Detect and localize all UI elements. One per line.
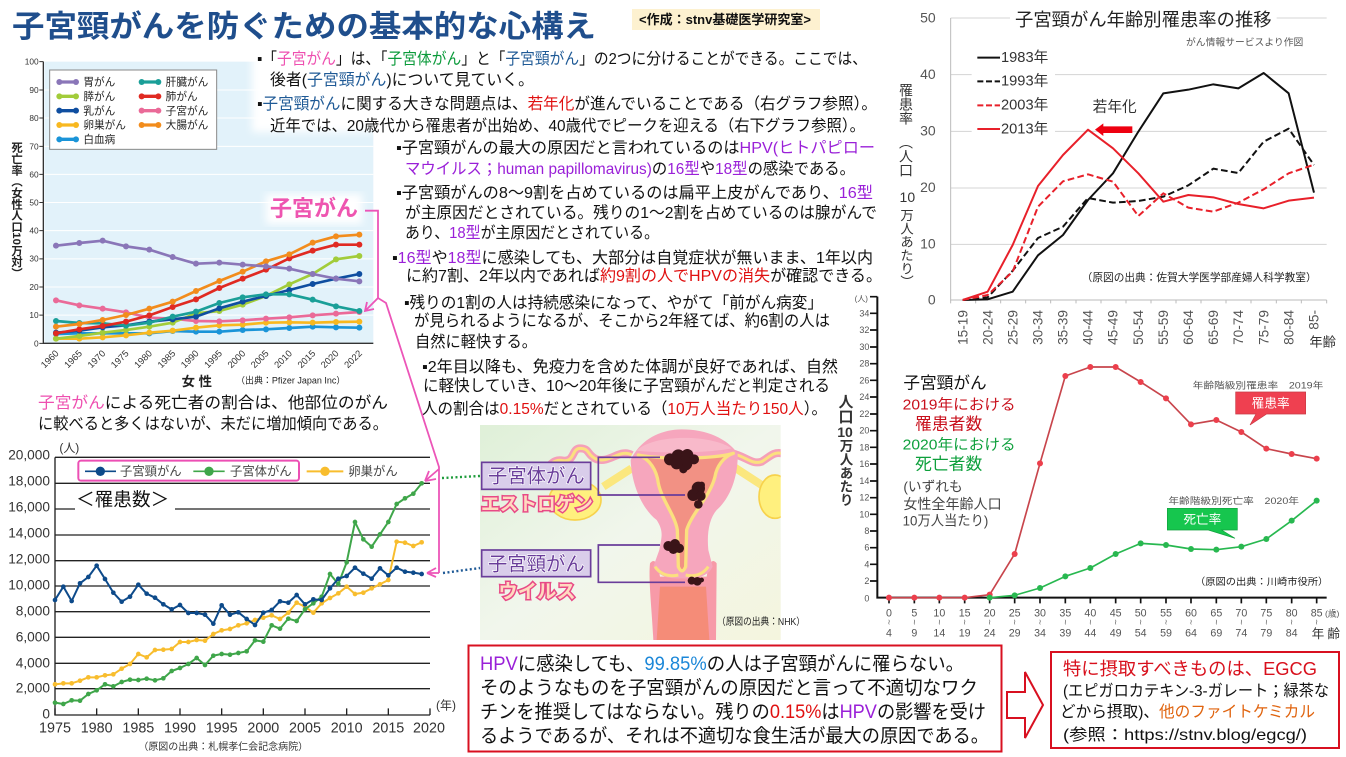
conclusion box: HPV: そのようなものを子宮頸がんの原因だと言って不適切なワク xyxy=(480,677,978,699)
y axis title: per 100k: 人口 xyxy=(836,394,854,424)
text block: HPV as main cause xyxy=(396,139,877,242)
x axis age labels: ≀ xyxy=(1139,617,1142,626)
source note: （原図の出典：佐賀大学医学部産婦人科学教室） xyxy=(1082,271,1317,284)
y axis title: 10 xyxy=(900,189,915,205)
x axis age labels: 35 xyxy=(1059,607,1071,619)
x axis age labels: 19 xyxy=(959,627,971,639)
chart: incidence count by year: 8,000 xyxy=(16,603,50,618)
chart description: 子宮頸がん xyxy=(903,373,987,392)
chart: age-specific incidence and death rate: 8 xyxy=(864,526,869,536)
y axis title: （人口 xyxy=(898,135,914,177)
x axis age labels: 70 xyxy=(1235,607,1247,619)
text block: HPV as main cause: ▪子宮頸がんの8～9割を占めているのは扁平上皮がんであり、 16型 xyxy=(396,184,873,202)
chart: cancer mortality by site xyxy=(10,57,373,389)
x axis age labels: 60 xyxy=(1185,607,1197,619)
chart: incidence count by year: 0 xyxy=(42,707,50,722)
chart: incidence count by year: (人) xyxy=(59,441,79,455)
chart: incidence count by year: 6,000 xyxy=(16,629,50,644)
x axis age labels: 35-39 xyxy=(1056,310,1071,345)
chart: cancer mortality by site: 1960 xyxy=(39,348,61,370)
callout: death rate: 死亡率 xyxy=(1183,513,1221,527)
text block: classification and young-age trend: 後者(子宮頸がん)について見ていく。 xyxy=(270,71,534,89)
chart: cancer mortality by site: 1985 xyxy=(156,348,177,370)
chart description: (いずれも xyxy=(903,479,963,495)
label: cervical cancer: ウイルス xyxy=(498,581,576,603)
x axis age labels: 75-79 xyxy=(1256,310,1271,345)
y axis title: 万人あたり） xyxy=(898,208,913,288)
legend: cancer sites: 卵巣がん xyxy=(83,119,126,132)
x axis age labels: ≀ xyxy=(1265,617,1268,626)
x axis age labels: 49 xyxy=(1110,627,1122,639)
chart: incidence count by year: 10,000 xyxy=(8,577,50,592)
x axis age labels: 84 xyxy=(1286,627,1298,639)
source note: NHK: （原図の出典：NHK） xyxy=(717,615,805,628)
chart: incidence count by year: 20,000 xyxy=(8,447,50,462)
x axis age labels: ≀ xyxy=(1064,617,1067,626)
connector: dotted link to cervical cancer xyxy=(443,568,480,573)
chart: age-specific incidence and death rate: 22 xyxy=(859,409,869,419)
x axis age labels: ≀ xyxy=(1039,617,1041,626)
chart: incidence count by year: 1985 xyxy=(122,721,154,737)
chart: incidence by age trend: 20 xyxy=(920,179,936,195)
arrow: younger onset: 若年化 xyxy=(1093,98,1137,115)
x axis age labels: 55-59 xyxy=(1156,310,1171,345)
chart: age-specific incidence and death rate: (人) xyxy=(855,294,868,303)
y axis title xyxy=(898,83,915,288)
legend: cancer sites: 子宮がん xyxy=(166,104,209,117)
text block: uterine cancer death share: 子宮がんによる死亡者の割合は、他部位のがん xyxy=(38,394,388,412)
y axis title: per 100k: 10 xyxy=(837,424,853,440)
chart: age-specific incidence and death rate: 16 xyxy=(859,459,869,469)
chart: age-specific incidence and death rate: 24 xyxy=(859,392,869,402)
x axis age labels: 5 xyxy=(911,607,917,619)
chart description: 2019年における xyxy=(903,396,1016,413)
label: incidence: ＜罹患数＞ xyxy=(76,489,169,510)
callout: death rate: 年齢階級別死亡率 2020年 xyxy=(1168,495,1299,506)
x axis age labels: ≀ xyxy=(938,617,941,626)
text block: natural clearance: 自然に軽快する。 xyxy=(415,333,537,351)
callout: death rate xyxy=(1167,495,1299,538)
callout: incidence rate: 年齢階級別罹患率 2019年 xyxy=(1193,379,1323,390)
text block: HPV as main cause: が主原因だとされている。残りの1～2割を占めているのは腺がんで xyxy=(405,204,877,222)
x axis age labels: 50-54 xyxy=(1131,310,1146,345)
x axis units xyxy=(1312,607,1340,641)
chart: incidence count by year: 16,000 xyxy=(8,499,50,514)
chart: age-specific incidence and death rate: 14 xyxy=(859,476,869,486)
text block: uterine cancer death share: に較べると多くはないが、未だに増加傾向である。 xyxy=(38,415,388,433)
x axis age labels: 75 xyxy=(1260,607,1272,619)
source note: （出典：Pfizer Japan Inc） xyxy=(236,374,345,385)
connector: uterine cancer callout: 子宮がん xyxy=(270,196,358,221)
x axis age labels: 54 xyxy=(1135,627,1147,639)
x axis age labels: ≀ xyxy=(963,617,966,626)
chart: cancer mortality by site: 1975 xyxy=(109,348,131,370)
chart: incidence count by year: 2010 xyxy=(331,721,363,737)
connector: dotted link to uterine body cancer xyxy=(442,476,480,478)
chart: incidence by age trend xyxy=(898,7,1336,350)
x axis age labels: 65 xyxy=(1210,607,1222,619)
legend: years: 1993年 xyxy=(1001,73,1048,90)
chart: age-specific incidence and death rate: 12 xyxy=(859,493,869,503)
chart: cancer mortality by site: 1980 xyxy=(132,348,154,370)
x axis unit: 年齢 xyxy=(1309,335,1336,350)
x axis age labels: 34 xyxy=(1034,627,1046,639)
bracket lines xyxy=(598,457,685,582)
legend: years: 2013年 xyxy=(1001,120,1048,137)
chart: cancer mortality by site: 80 xyxy=(29,113,39,123)
legend: cancer sites: 乳がん xyxy=(83,104,116,117)
arrow: to recommendation xyxy=(1007,672,1043,738)
text block: natural clearance: が見られるようになるが、そこから2年経てば、約6割の人は xyxy=(414,312,830,330)
x axis age labels: 79 xyxy=(1260,627,1272,639)
x axis age labels: ≀ xyxy=(1190,617,1192,626)
legend: cancer sites: 肺がん xyxy=(166,90,198,103)
chart: age-specific incidence and death rate: 2 xyxy=(864,576,869,586)
chart: incidence count by year: 2015 xyxy=(372,721,404,737)
chart: incidence count by year: 1990 xyxy=(164,721,196,737)
callout: incidence rate xyxy=(1193,379,1323,425)
x axis age labels: ≀ xyxy=(1114,617,1117,626)
legend: years xyxy=(977,49,1048,137)
chart: incidence count by year xyxy=(8,441,456,753)
chart: cancer mortality by site: 1965 xyxy=(62,348,84,370)
label: cervical cancer: 子宮頸がん xyxy=(488,553,585,575)
ovaries and tubes xyxy=(549,448,791,520)
title: 子宮頸がんを防ぐための基本的な心構え xyxy=(12,9,596,44)
text block: HPV as main cause: マウイルス；human papillomavirus)の16型や18型の感染である。 xyxy=(405,160,855,178)
chart: incidence by age trend: 50 xyxy=(920,9,936,25)
x axis age labels: 50 xyxy=(1135,607,1147,619)
chart: incidence by age trend: 40 xyxy=(920,66,936,82)
chart title: 子宮頸がん年齢別罹患率の推移 xyxy=(1015,9,1272,30)
text block: HPV as main cause: ▪子宮頸がんの最大の原因だと言われているのはHPV(ヒトパピロー xyxy=(396,139,875,157)
x axis age labels: ≀ xyxy=(988,617,991,626)
chart: incidence count by year: 2000 xyxy=(247,721,279,737)
x axis age labels xyxy=(886,607,1323,639)
x axis age labels: 65-69 xyxy=(1206,310,1221,345)
x axis age labels: ≀ xyxy=(1089,617,1092,626)
recommendation box: (エピガロカテキン-3-ガレート；緑茶な xyxy=(1063,682,1329,700)
chart: cancer mortality by site: 1995 xyxy=(202,348,224,370)
chart description: 女性全年齢人口 xyxy=(903,496,1002,512)
text block: classification and young-age trend: ▪子宮頸がんに関する大きな問題点は、若年化が進んでいることである（右グラフ参照）。 xyxy=(257,95,877,113)
x axis age labels: 9 xyxy=(911,627,917,639)
chart description xyxy=(903,373,1016,529)
conclusion box: HPV xyxy=(468,646,1002,752)
text block: uterine cancer death share xyxy=(38,394,388,433)
chart: cancer mortality by site: 70 xyxy=(29,141,39,151)
label: uterine body cancer: エストロゲン xyxy=(481,494,593,515)
x axis title: 女 性 xyxy=(182,373,212,389)
x axis age labels: ≀ xyxy=(1215,617,1218,626)
chart description: 2020年における xyxy=(903,436,1016,453)
label: uterine body cancer: 子宮体がん xyxy=(488,466,585,488)
conclusion box: HPV: HPVに感染しても、99.85%の人は子宮頸がんに罹らない。 xyxy=(480,653,964,675)
x axis age labels: ≀ xyxy=(1240,617,1243,626)
x axis age labels: 39 xyxy=(1059,627,1071,639)
chart: cancer mortality by site: 2005 xyxy=(249,348,271,370)
x axis age labels: 24 xyxy=(984,627,996,639)
legend: uterine / ovarian series: 子宮体がん xyxy=(230,464,292,479)
x axis age labels: 40-44 xyxy=(1081,310,1096,345)
x axis age labels: 55 xyxy=(1160,607,1172,619)
legend: cancer sites xyxy=(50,70,217,149)
text block: natural clearance: に約7割、2年以内であれば約9割の人でHPVの消失が確認できる。 xyxy=(406,267,882,285)
text block: natural clearance: 人の割合は0.15%だとされている（10万人当たり150人）。 xyxy=(422,400,827,418)
text block: natural clearance: ▪2年目以降も、免疫力を含めた体調が良好であれば、自然 xyxy=(422,358,838,376)
x axis age labels: 85- xyxy=(1307,310,1322,330)
tumors xyxy=(663,449,706,586)
x axis age labels: ≀ xyxy=(1290,617,1293,626)
x axis age labels: 69 xyxy=(1210,627,1222,639)
chart: cancer mortality by site: 60 xyxy=(29,169,39,179)
recommendation box: (参照：https://stnv.blog/egcg/) xyxy=(1063,726,1307,744)
x axis units: 年齢 xyxy=(1312,627,1340,641)
chart: cancer mortality by site: 2015 xyxy=(296,348,317,370)
legend: uterine / ovarian series: 卵巣がん xyxy=(348,464,398,479)
chart: cancer mortality by site: 100 xyxy=(25,57,39,67)
x axis age labels: 29 xyxy=(1009,627,1021,639)
text block: natural clearance: ▪16型や18型に感染しても、大部分は自覚症状が無いまま、1年以内 xyxy=(392,249,873,267)
x axis age labels: ≀ xyxy=(888,617,890,626)
x axis age labels: 30 xyxy=(1034,607,1046,619)
chart: age-specific incidence and death rate: 28 xyxy=(859,359,869,369)
x axis age labels: 74 xyxy=(1235,627,1247,639)
x axis age labels: 15 xyxy=(959,607,971,619)
chart: cancer mortality by site: 10 xyxy=(29,310,39,320)
chart: age-specific incidence and death rate: 10 xyxy=(859,509,869,519)
legend: cancer sites: 胃がん xyxy=(83,76,116,89)
chart: cancer mortality by site: 2000 xyxy=(226,348,247,370)
x axis age labels: ≀ xyxy=(1315,617,1318,626)
chart: age-specific incidence and death rate: 18 xyxy=(859,442,869,452)
x axis age labels: 14 xyxy=(933,627,945,639)
chart: age-specific incidence and death rate: 6 xyxy=(864,543,869,553)
text block: natural clearance: ▪残りの1割の人は持続感染になって、やがて「前がん病変」 xyxy=(404,294,823,312)
white backing behind top text xyxy=(252,42,392,132)
chart: age-specific incidence and death rate: 20 xyxy=(859,426,869,436)
legend: cancer sites: 大腸がん xyxy=(166,119,209,132)
chart: cancer mortality by site: 1990 xyxy=(179,348,201,370)
chart: incidence count by year: (年) xyxy=(436,698,456,712)
chart: age-specific incidence and death rate: 26 xyxy=(859,375,869,385)
text block: natural clearance xyxy=(392,249,882,418)
x axis age labels: 80-84 xyxy=(1281,310,1296,345)
author tag xyxy=(632,9,820,30)
recommendation box xyxy=(1051,652,1339,748)
x axis age labels: ≀ xyxy=(1013,617,1016,626)
x axis age labels: 85 xyxy=(1311,607,1323,619)
x axis age labels: ≀ xyxy=(1165,617,1167,626)
chart: age-specific incidence and death rate: 0 xyxy=(864,593,869,603)
legend: cancer sites: 膵がん xyxy=(83,90,116,103)
chart: incidence count by year: 4,000 xyxy=(16,655,50,670)
source note: （原図の出典：川崎市役所） xyxy=(1195,576,1328,588)
data credit: がん情報サービスより作図 xyxy=(1186,37,1303,49)
chart: incidence count by year: 2020 xyxy=(413,721,445,737)
x axis age labels: 25-29 xyxy=(1005,310,1020,345)
chart description: 罹患者数 xyxy=(915,415,983,434)
chart: cancer mortality by site: 20 xyxy=(29,282,39,292)
legend: years: 2003年 xyxy=(1001,97,1048,114)
text block: HPV as main cause: あり、18型が主原因だとされている。 xyxy=(405,224,659,242)
x axis age labels: 45 xyxy=(1110,607,1122,619)
x axis age labels: 44 xyxy=(1084,627,1096,639)
chart: cancer mortality by site: 0 xyxy=(34,338,39,348)
uterine cavity xyxy=(638,453,733,571)
chart: incidence count by year: 18,000 xyxy=(8,473,50,488)
legend: uterine / ovarian series: 子宮頸がん xyxy=(120,464,182,479)
chart: cancer mortality by site: 2020 xyxy=(319,348,341,370)
chart: cancer mortality by site: 2022 xyxy=(342,348,364,370)
chart: age-specific incidence and death rate: 30 xyxy=(859,342,869,352)
x axis age labels: 4 xyxy=(886,627,892,639)
chart: age-specific incidence and death rate: 32 xyxy=(859,325,869,335)
callout: incidence rate: 罹患率 xyxy=(1252,397,1290,411)
author tag: <作成：stnv基礎医学研究室> xyxy=(639,12,811,27)
y axis title: per 100k: 万人あたり xyxy=(838,439,853,507)
y axis title: 罹患率 xyxy=(898,83,914,126)
x axis age labels: 64 xyxy=(1185,627,1197,639)
label: cervical cancer xyxy=(482,550,591,603)
x axis age labels: 20-24 xyxy=(980,310,995,345)
x axis age labels: 25 xyxy=(1009,607,1021,619)
chart: incidence by age trend: 30 xyxy=(920,122,936,138)
recommendation box: 特に摂取すべきものは、EGCG xyxy=(1063,659,1317,679)
x axis age labels: ≀ xyxy=(913,617,916,626)
chart: incidence count by year: 2005 xyxy=(289,721,321,737)
x axis age labels: 60-64 xyxy=(1181,310,1196,345)
chart: age-specific incidence and death rate: 4 xyxy=(864,559,869,569)
chart: cancer mortality by site: 1970 xyxy=(86,348,107,370)
y axis title: 死亡率（女性人口10万対） xyxy=(10,142,23,279)
recommendation box: どから摂取)、他のファイトケミカル xyxy=(1060,703,1315,721)
text block: classification and young-age trend: ▪「子宮がん」は、「子宮体がん」と「子宮頸がん」の2つに分けることができる。ここでは、 xyxy=(257,50,867,68)
chart: incidence count by year: 14,000 xyxy=(8,525,50,540)
x axis age labels: 10 xyxy=(933,607,945,619)
legend: years: 1983年 xyxy=(1001,49,1048,66)
label: uterine body cancer xyxy=(481,462,593,515)
connector: uterine cancer callout xyxy=(266,194,439,577)
x axis age labels: 15-19 xyxy=(955,310,970,345)
conclusion box: HPV: るようであるが、それは不適切な食生活が最大の原因である。 xyxy=(480,725,989,747)
chart description: 死亡者数 xyxy=(915,455,983,474)
chart: cancer mortality by site: 2010 xyxy=(272,348,294,370)
chart: age-specific incidence and death rate xyxy=(855,294,1340,641)
chart: cancer mortality by site: 90 xyxy=(29,85,39,95)
text block: classification and young-age trend: 近年では、20歳代から罹患者が出始め、40歳代でピークを迎える（右下グラフ参照）。 xyxy=(270,117,865,135)
conclusion box: HPV: チンを推奨してはならない。残りの0.15%はHPVの影響を受け xyxy=(480,701,986,723)
chart: incidence count by year: 1995 xyxy=(206,721,238,737)
chart description: 10万人当たり) xyxy=(903,513,988,529)
chart: age-specific incidence and death rate: 34 xyxy=(859,308,869,318)
chart: incidence by age trend: 10 xyxy=(920,235,936,251)
y axis title: per 100k xyxy=(836,394,854,507)
x axis age labels: 70-74 xyxy=(1231,310,1246,345)
text block: classification and young-age trend xyxy=(257,50,877,135)
x axis age labels: 0 xyxy=(886,607,892,619)
source note: （原図の出典：札幌孝仁会記念病院） xyxy=(138,740,308,753)
x axis age labels xyxy=(955,310,1322,345)
chart: incidence count by year: 1975 xyxy=(39,721,71,737)
illustration: uterus xyxy=(480,425,791,640)
x axis units: (歳) xyxy=(1325,607,1340,618)
chart: cancer mortality by site: 40 xyxy=(29,226,39,236)
legend: uterine / ovarian series xyxy=(78,461,405,481)
chart: cancer mortality by site: 30 xyxy=(29,254,39,264)
chart: incidence by age trend: 0 xyxy=(928,291,936,307)
vagina xyxy=(650,561,717,640)
x axis age labels: 59 xyxy=(1160,627,1172,639)
legend: cancer sites: 白血病 xyxy=(83,133,116,146)
chart: incidence count by year: 12,000 xyxy=(8,551,50,566)
text block: natural clearance: に軽快していき、10～20年後に子宮頸がんだと判定される xyxy=(423,377,830,395)
x axis age labels: 20 xyxy=(984,607,996,619)
chart: incidence count by year: 2,000 xyxy=(16,681,50,696)
uterus body xyxy=(631,429,738,579)
arrow: younger onset xyxy=(1093,98,1137,136)
chart: cancer mortality by site: 50 xyxy=(29,197,39,207)
legend: cancer sites: 肝臓がん xyxy=(166,76,209,89)
x axis age labels: 45-49 xyxy=(1106,310,1121,345)
x axis age labels: 40 xyxy=(1084,607,1096,619)
x axis age labels: 80 xyxy=(1286,607,1298,619)
x axis age labels: 30-34 xyxy=(1031,310,1046,345)
chart: incidence count by year: 1980 xyxy=(81,721,113,737)
